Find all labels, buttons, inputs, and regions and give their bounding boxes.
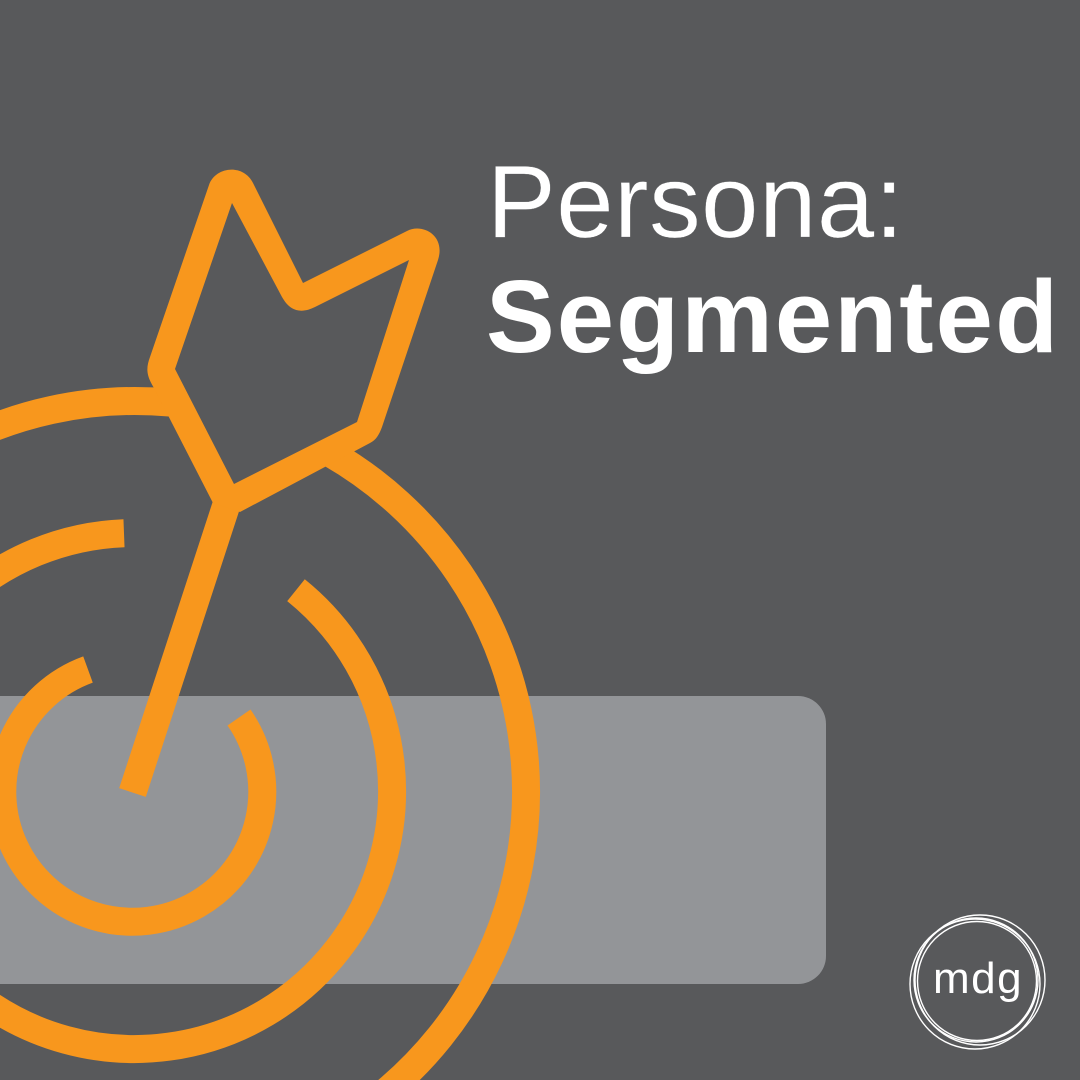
arrow shaft xyxy=(132,500,228,792)
title xyxy=(486,144,1060,374)
icon: target with arrow xyxy=(0,170,526,1080)
arrow fletching xyxy=(147,170,440,512)
target middle ring: right segment xyxy=(0,590,392,1049)
title line: Persona: Persona: xyxy=(487,144,904,259)
logo rings xyxy=(910,915,1045,1049)
target inner ring xyxy=(2,670,262,922)
target middle ring: left segment xyxy=(0,533,124,600)
logo wordmark: mdg xyxy=(933,954,1023,1003)
target outer ring: left segment xyxy=(0,401,170,453)
grey rounded panel xyxy=(0,696,826,984)
title line: Segmented: Segmented xyxy=(486,259,1060,374)
target outer ring: right segment xyxy=(330,453,526,1080)
logo: mdg xyxy=(910,915,1045,1049)
